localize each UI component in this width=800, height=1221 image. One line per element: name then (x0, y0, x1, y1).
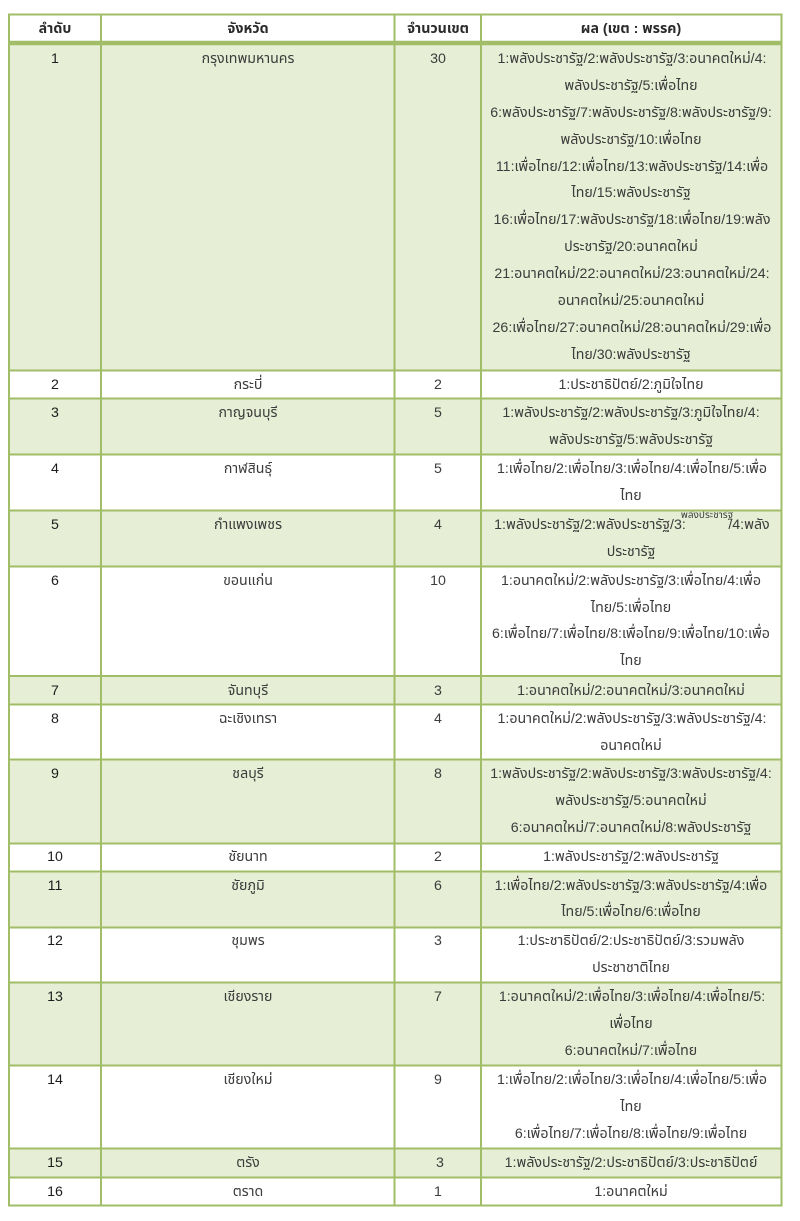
row 6: ขอนแก่น: 10 (430, 573, 446, 589)
row 9: ชลบุรี: 8 (434, 766, 442, 782)
row 16: ตราด (47, 1183, 668, 1200)
row 2: กระบี่: 1:ประชาธิปัตย์/2:ภูมิใจไทย (558, 377, 704, 393)
row 13: เชียงราย (8, 982, 782, 1065)
row 5: กำแพงเพชร: ประชารัฐ (607, 544, 656, 560)
row 16: ตราด: 16 (47, 1184, 63, 1200)
row 13: เชียงราย: เชียงราย (224, 989, 272, 1005)
row 2: กระบี่: กระบี่ (234, 374, 262, 393)
results row 1: พลังประชารัฐ/5:เพื่อไทย (564, 75, 698, 94)
row 10: ชัยนาท (47, 849, 719, 865)
row 3: กาญจนบุรี: กาญจนบุรี (219, 405, 278, 421)
row 6: ขอนแก่น: 6 (51, 573, 59, 589)
row 5: กำแพงเพชร: 1:พลังประชารัฐ/2:พลังประชารัฐ/3: (494, 517, 686, 533)
row 8: ฉะเชิงเทรา (51, 710, 766, 754)
row 1: กรุงเทพมหานคร: กรุงเทพมหานคร (202, 51, 295, 67)
row 3: กาญจนบุรี (8, 399, 782, 454)
row 11: ชัยภูมิ: ไทย/5:เพื่อไทย/6:เพื่อไทย (560, 901, 701, 920)
row 9: ชลบุรี: 6:อนาคตใหม่/7:อนาคตใหม่/8:พลังประชารัฐ (511, 819, 751, 836)
row 9: ชลบุรี: พลังประชารัฐ/5:อนาคตใหม่ (555, 792, 707, 809)
row 8: ฉะเชิงเทรา: 4 (434, 711, 442, 727)
row 11: ชัยภูมิ: 1:เพื่อไทย/2:พลังประชารัฐ/3:พลังประชารัฐ/4:เพื่อ (495, 875, 767, 894)
row 13: เชียงราย: 6:อนาคตใหม่/7:เพื่อไทย (565, 1040, 697, 1059)
row 12: ชุมพร: 1:ประชาธิปัตย์/2:ประชาธิปัตย์/3:รวมพลัง (518, 933, 744, 949)
row 9: ชลบุรี: ชลบุรี (232, 766, 264, 782)
results row 1: อนาคตใหม่/25:อนาคตใหม่ (558, 292, 704, 309)
row 5: กำแพงเพชร: 5 (51, 517, 59, 533)
row 15: ตรัง: ตรัง (236, 1155, 260, 1171)
row 7: จันทบุรี (8, 676, 782, 704)
row 3: กาญจนบุรี: พลังประชารัฐ/5:พลังประชารัฐ (549, 432, 713, 448)
row 15: ตรัง: 3 (436, 1155, 444, 1171)
row 8: ฉะเชิงเทรา: อนาคตใหม่ (600, 737, 662, 754)
row 3: กาญจนบุรี: 3 (51, 405, 59, 421)
row 1: กรุงเทพมหานคร: 1 (51, 51, 59, 67)
row 4: กาฬสินธุ์: 4 (51, 461, 59, 477)
header: ผล: ผล (เขต : พรรค) (581, 21, 681, 37)
header: จำนวนเขต: จำนวนเขต (407, 21, 469, 37)
row 2: กระบี่: 2 (51, 377, 59, 393)
results row 1: พลังประชารัฐ/10:เพื่อไทย (560, 129, 702, 148)
row 7: จันทบุรี: 1:อนาคตใหม่/2:อนาคตใหม่/3:อนาคตใหม่ (517, 682, 745, 699)
row 4: กาฬสินธุ์ (51, 458, 767, 504)
row 6: ขอนแก่น: ไทย/5:เพื่อไทย (590, 597, 671, 616)
results row 1: ไทย/30:พลังประชารัฐ (570, 347, 691, 363)
row 12: ชุมพร: 3 (434, 933, 442, 949)
row 10: ชัยนาท: 2 (434, 849, 442, 865)
row 4: กาฬสินธุ์: กาฬสินธุ์ (224, 461, 272, 477)
row 2: กระบี่ (51, 374, 704, 393)
row 14: เชียงใหม่ (47, 1069, 767, 1142)
results row 1: 21:อนาคตใหม่/22:อนาคตใหม่/23:อนาคตใหม่/24: (494, 265, 770, 282)
row 5: กำแพงเพชร (8, 509, 782, 566)
row 14: เชียงใหม่: 1:เพื่อไทย/2:เพื่อไทย/3:เพื่อไทย/4:เพื่อไทย/5:เพื่อ (497, 1069, 767, 1088)
row 12: ชุมพร: 12 (47, 933, 63, 949)
row 12: ชุมพร: ประชาชาติไทย (592, 960, 670, 976)
row 15: ตรัง (8, 1149, 782, 1177)
table header row (39, 21, 681, 37)
results row 1: 1:พลังประชารัฐ/2:พลังประชารัฐ/3:อนาคตใหม่/4: (498, 50, 766, 67)
row 16: ตราด: ตราด (233, 1184, 263, 1200)
results row 1: 11:เพื่อไทย/12:เพื่อไทย/13:พลังประชารัฐ/14:เพื่อ (496, 156, 768, 175)
row 8: ฉะเชิงเทรา: 1:อนาคตใหม่/2:พลังประชารัฐ/3:พลังประชารัฐ/4: (498, 710, 766, 727)
results row 1: 16:เพื่อไทย/17:พลังประชารัฐ/18:เพื่อไทย/19:พลัง (493, 209, 771, 228)
row 15: ตรัง: 15 (47, 1155, 63, 1171)
row 5: กำแพงเพชร: /4:พลัง (728, 517, 770, 533)
row 8: ฉะเชิงเทรา: ฉะเชิงเทรา (219, 711, 277, 727)
row 9: ชลบุรี (8, 760, 782, 843)
row 8: ฉะเชิงเทรา: 8 (51, 711, 59, 727)
results row 1 (490, 50, 772, 363)
results row 1: ไทย/15:พลังประชารัฐ (570, 185, 691, 201)
row 11: ชัยภูมิ: ชัยภูมิ (231, 878, 265, 894)
header: ลำดับ: ลำดับ (39, 21, 71, 37)
row 9: ชลบุรี: 9 (51, 766, 59, 782)
row 4: กาฬสินธุ์: ไทย (619, 488, 642, 504)
row 2: กระบี่: 2 (434, 377, 442, 393)
row 12: ชุมพร (47, 933, 744, 976)
row 13: เชียงราย: 1:อนาคตใหม่/2:เพื่อไทย/3:เพื่อไทย/4:เพื่อไทย/5: (499, 986, 765, 1005)
row 15: ตรัง: 1:พลังประชารัฐ/2:ประชาธิปัตย์/3:ประชาธิปัตย์ (505, 1155, 757, 1171)
row 4: กาฬสินธุ์: 5 (434, 461, 442, 477)
row 1: กรุงเทพมหานคร: 30 (430, 51, 446, 67)
results row 1: 6:พลังประชารัฐ/7:พลังประชารัฐ/8:พลังประชารัฐ/9: (490, 105, 772, 121)
row 11: ชัยภูมิ: 11 (48, 878, 62, 894)
row 16: ตราด: 1 (434, 1184, 442, 1200)
row 5: กำแพงเพชร: กำแพงเพชร (214, 517, 282, 533)
row 12: ชุมพร: ชุมพร (231, 933, 265, 949)
row 6: ขอนแก่น: ขอนแก่น (223, 572, 273, 589)
row 10: ชัยนาท: ชัยนาท (228, 849, 268, 865)
superscript label: พลังประชารัฐ (681, 509, 734, 521)
row 16: ตราด: 1:อนาคตใหม่ (594, 1183, 668, 1200)
row 6: ขอนแก่น: ไทย (619, 653, 642, 669)
row 13: เชียงราย: 7 (434, 989, 442, 1005)
row 9: ชลบุรี: 1:พลังประชารัฐ/2:พลังประชารัฐ/3:พลังประชารัฐ/4: (490, 766, 772, 782)
row 6: ขอนแก่น: 6:เพื่อไทย/7:เพื่อไทย/8:เพื่อไทย/9:เพื่อไทย/10:เพื่อ (492, 623, 770, 642)
row 7: จันทบุรี: 3 (434, 683, 442, 699)
row 10: ชัยนาท: 1:พลังประชารัฐ/2:พลังประชารัฐ (543, 849, 719, 865)
results row 1: ประชารัฐ/20:อนาคตใหม่ (564, 238, 698, 255)
row 14: เชียงใหม่: 6:เพื่อไทย/7:เพื่อไทย/8:เพื่อไทย/9:เพื่อไทย (515, 1123, 747, 1142)
row 7: จันทบุรี: 7 (51, 683, 59, 699)
row 3: กาญจนบุรี: 5 (434, 405, 442, 421)
row 3: กาญจนบุรี: 1:พลังประชารัฐ/2:พลังประชารัฐ/3:ภูมิใจไทย/4: (502, 405, 760, 421)
row 7: จันทบุรี: จันทบุรี (228, 683, 268, 699)
row 11: ชัยภูมิ (8, 871, 782, 927)
row 14: เชียงใหม่: ไทย (619, 1099, 642, 1115)
row 6: ขอนแก่น (51, 570, 770, 669)
results row 1: 26:เพื่อไทย/27:อนาคตใหม่/28:อนาคตใหม่/29:เพื่อ (493, 317, 771, 336)
row 13: เชียงราย: 13 (47, 989, 63, 1005)
row 6: ขอนแก่น: 1:อนาคตใหม่/2:พลังประชารัฐ/3:เพื่อไทย/4:เพื่อ (501, 570, 761, 589)
row 14: เชียงใหม่: 9 (434, 1072, 442, 1088)
row 10: ชัยนาท: 10 (47, 849, 63, 865)
row 11: ชัยภูมิ: 6 (434, 878, 442, 894)
row 1: กรุงเทพมหานคร (8, 43, 782, 370)
row 13: เชียงราย: เพื่อไทย (609, 1013, 653, 1032)
row 4: กาฬสินธุ์: 1:เพื่อไทย/2:เพื่อไทย/3:เพื่อไทย/4:เพื่อไทย/5:เพื่อ (497, 458, 767, 477)
row 14: เชียงใหม่: 14 (47, 1072, 63, 1088)
header: จังหวัด: จังหวัด (227, 21, 269, 37)
row 5: กำแพงเพชร: 4 (434, 517, 442, 533)
row 14: เชียงใหม่: เชียงใหม่ (223, 1071, 273, 1088)
